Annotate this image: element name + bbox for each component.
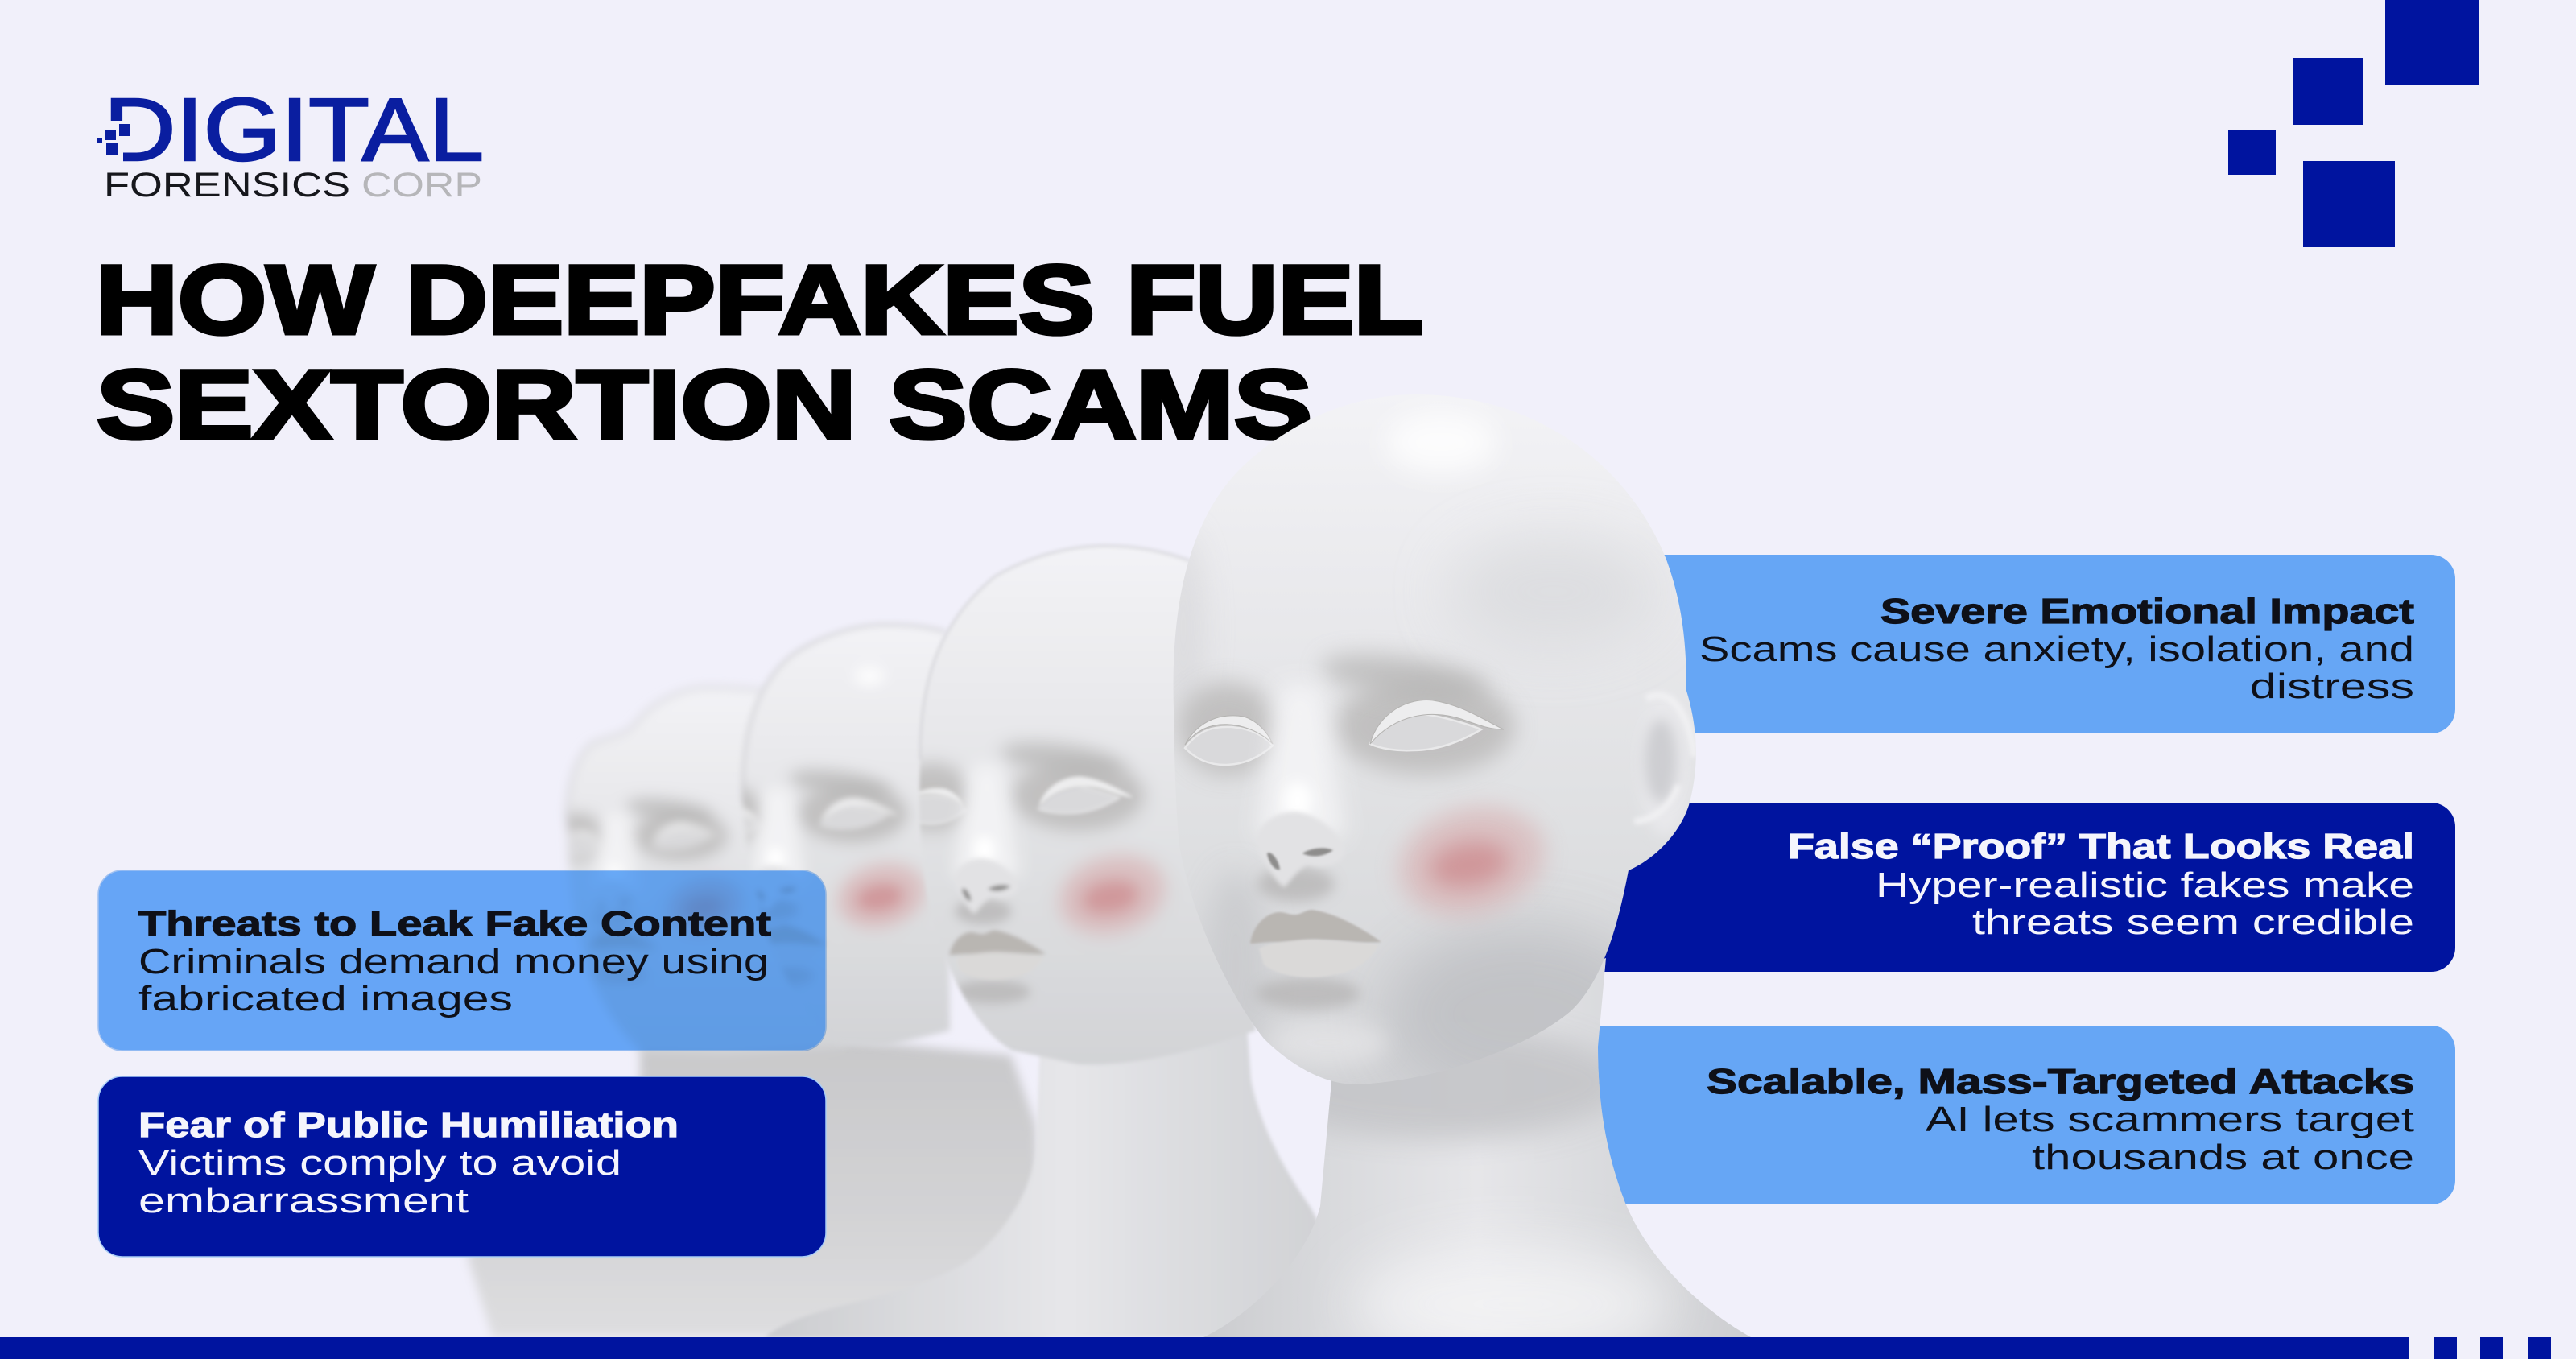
decorative squares top right bbox=[2228, 0, 2479, 247]
third mannequin, blurred bbox=[739, 622, 952, 1043]
panel: severe emotional impact: Severe Emotional Impact bbox=[1880, 592, 2414, 631]
logo: Digital Forensics Corp: CORP bbox=[361, 166, 482, 204]
footer bar with squares bbox=[0, 1337, 2551, 1359]
logo: Digital Forensics Corp: DIGITAL bbox=[104, 81, 484, 180]
logo: Digital Forensics Corp: FORENSICS bbox=[104, 166, 350, 204]
mannequin heads photo bbox=[468, 394, 1751, 1359]
panel: severe emotional impact: Scams cause anxiety, isolation, and bbox=[1699, 630, 2414, 669]
title: HOW DEEPFAKES FUEL bbox=[96, 245, 1423, 354]
panel: false proof that looks real: Hyper-realistic fakes make bbox=[1876, 865, 2414, 905]
panel: false proof that looks real bbox=[1530, 803, 2455, 972]
panel: scalable mass-targeted attacks: Scalable, Mass-Targeted Attacks bbox=[1707, 1062, 2414, 1101]
panel: threats to leak fake content: fabricated images bbox=[138, 979, 513, 1018]
panel: fear of public humiliation: Fear of Public Humiliation bbox=[138, 1105, 679, 1145]
second mannequin, soft focus bbox=[765, 546, 1368, 1337]
panel: scalable mass-targeted attacks: AI lets scammers target bbox=[1926, 1100, 2414, 1139]
panel: fear of public humiliation: Victims comply to avoid bbox=[138, 1143, 621, 1183]
front mannequin head bbox=[1163, 394, 1696, 1103]
panel: severe emotional impact bbox=[1530, 555, 2455, 733]
title bbox=[96, 245, 1423, 459]
panel: threats to leak fake content: Threats to Leak Fake Content bbox=[138, 904, 771, 944]
logo: Digital Forensics Corp bbox=[97, 81, 484, 204]
panel: threats to leak fake content bbox=[98, 870, 826, 1051]
panel: false proof that looks real: threats seem credible bbox=[1972, 903, 2414, 942]
panel: scalable mass-targeted attacks: thousands at once bbox=[2032, 1138, 2414, 1177]
panel: severe emotional impact: distress bbox=[2250, 667, 2414, 706]
panel: scalable mass-targeted attacks bbox=[1530, 1026, 2455, 1204]
rear mannequin, heavily blurred bbox=[468, 688, 1046, 1337]
panel: fear of public humiliation: embarrassment bbox=[138, 1181, 469, 1221]
ear bbox=[1639, 694, 1690, 836]
panel: false proof that looks real: False “Proof” That Looks Real bbox=[1788, 827, 2414, 866]
panel: threats to leak fake content: Criminals demand money using bbox=[138, 942, 769, 981]
title: SEXTORTION SCAMS bbox=[97, 349, 1312, 459]
front mannequin neck bbox=[1203, 958, 1751, 1359]
panel: fear of public humiliation bbox=[98, 1076, 826, 1257]
